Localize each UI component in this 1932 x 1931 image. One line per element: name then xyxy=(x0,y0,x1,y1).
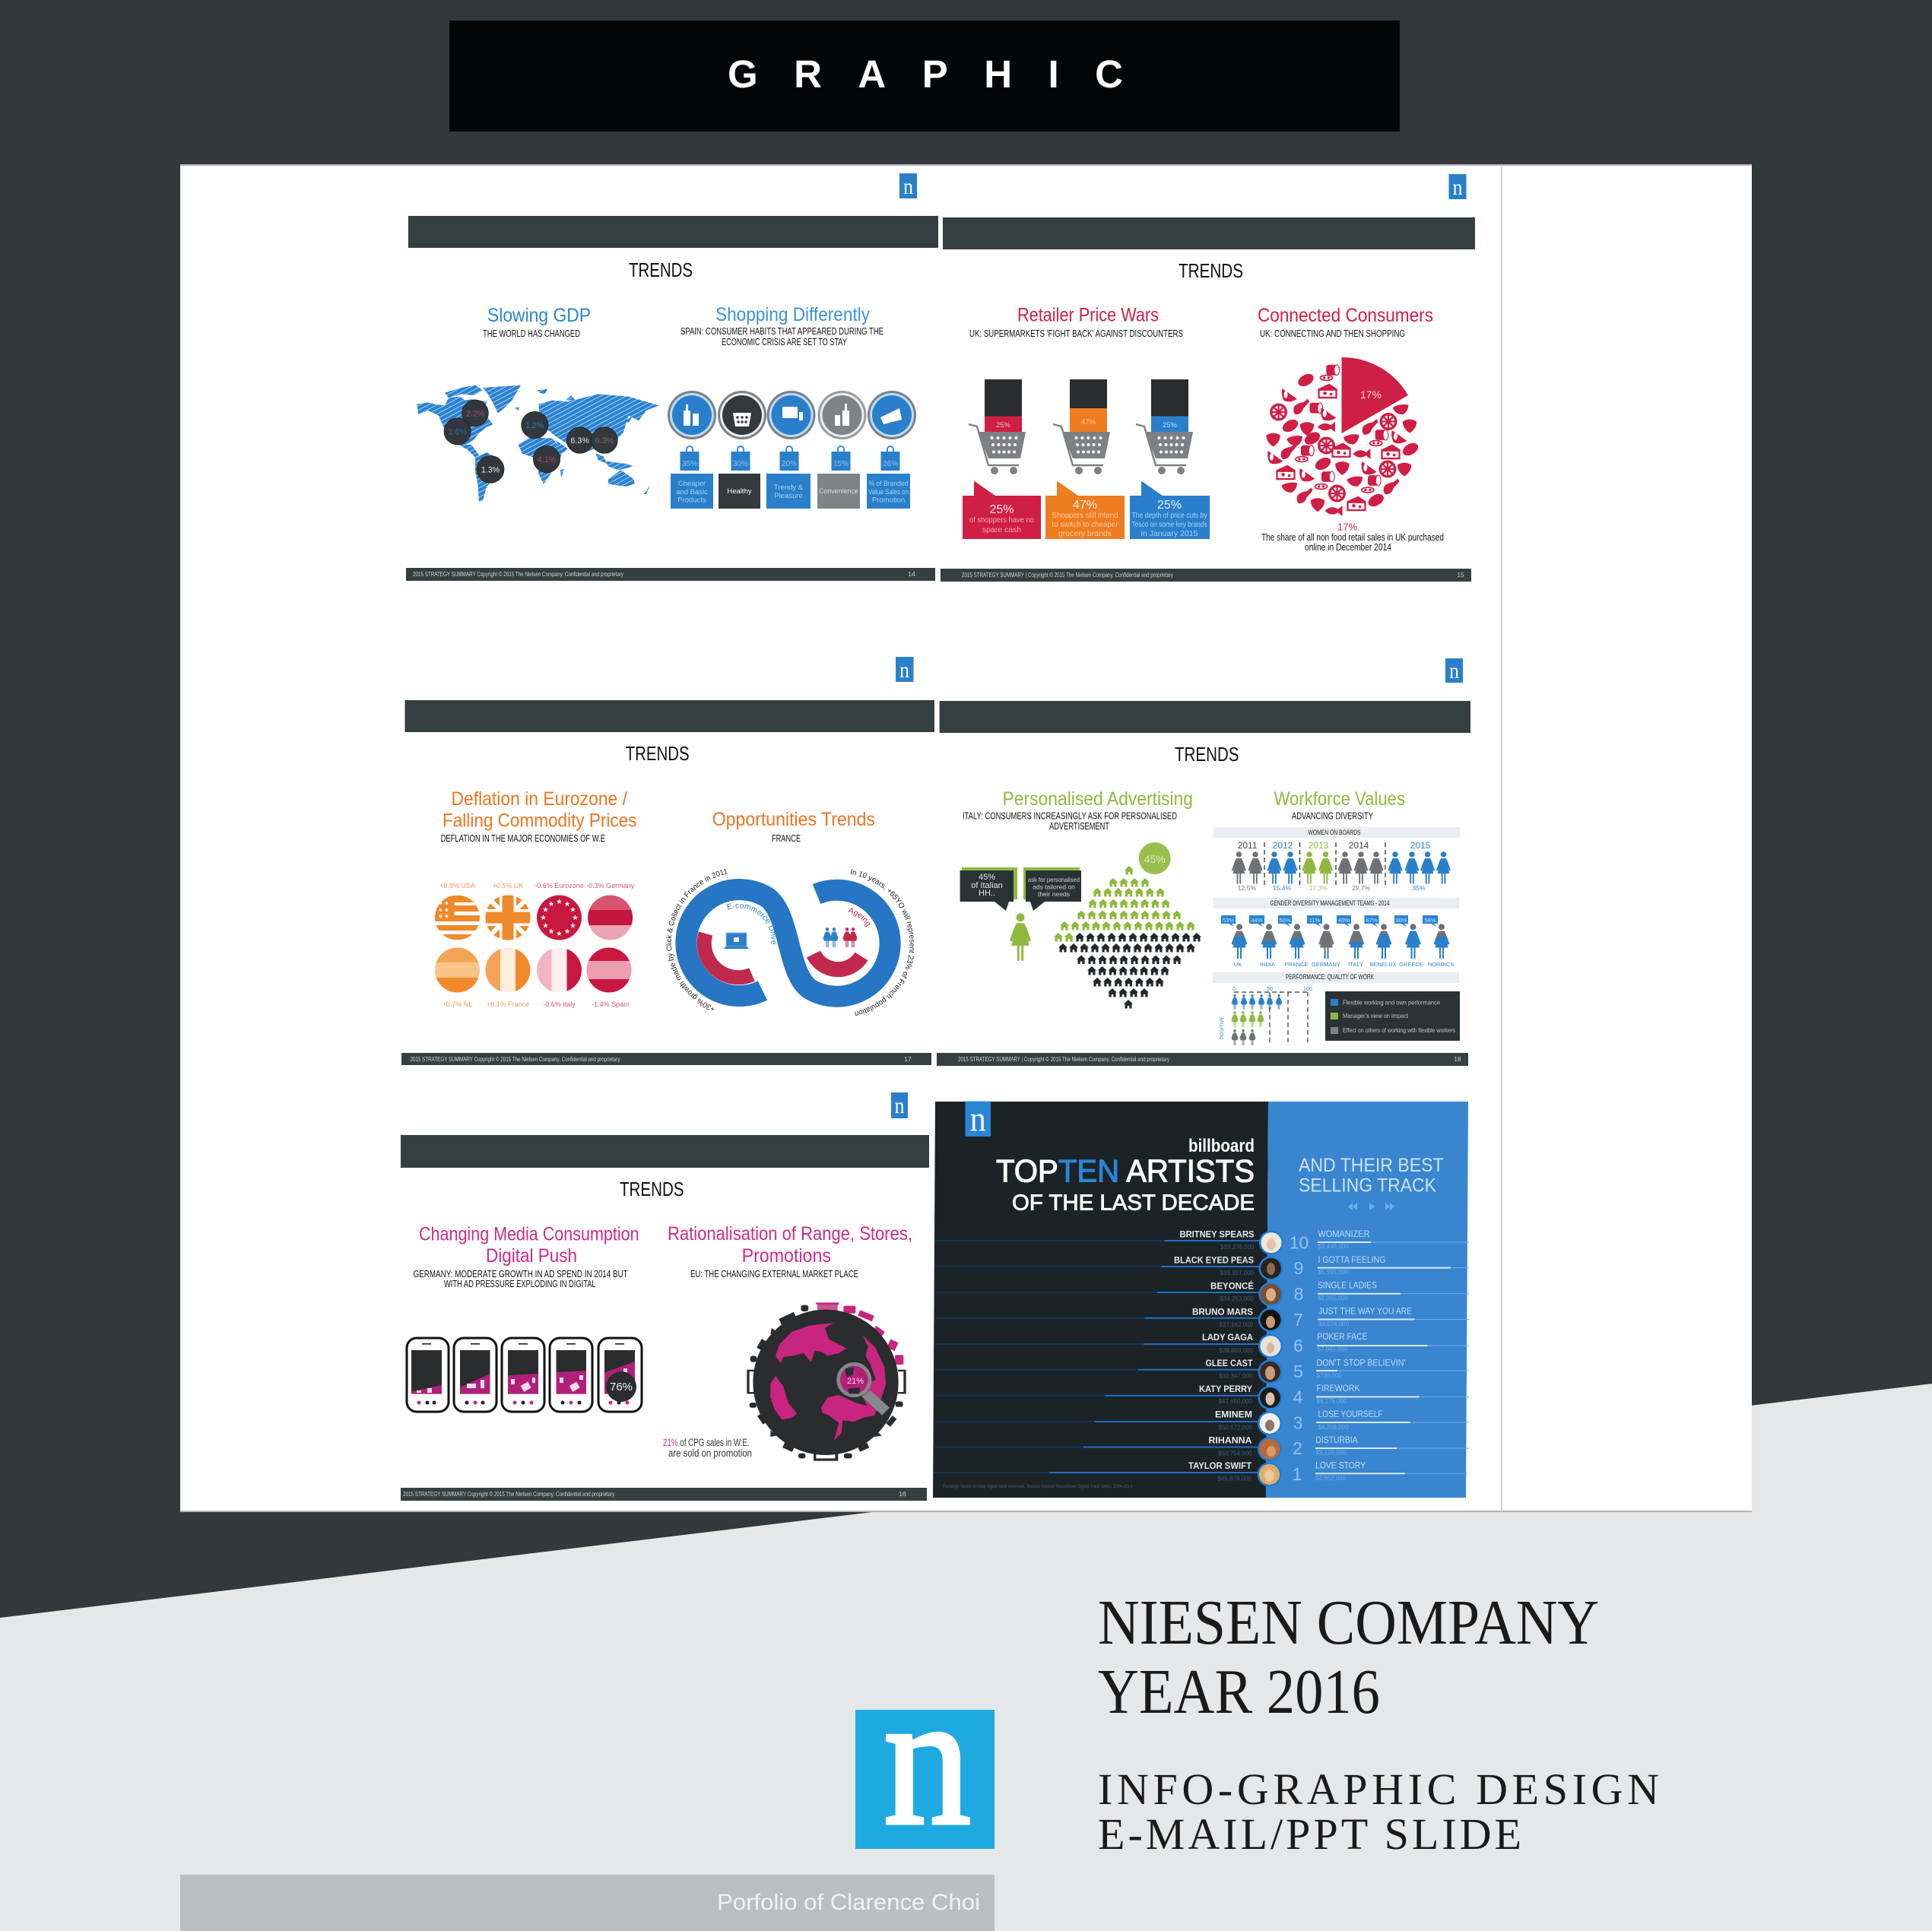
artist row 1 xyxy=(934,1460,1467,1486)
subheading: world changed: THE WORLD HAS CHANGED xyxy=(483,328,580,339)
heading: trends: TRENDS xyxy=(626,742,690,765)
legend box xyxy=(1325,991,1460,1041)
artist row 9: BLACK EYED PEAS xyxy=(1174,1254,1254,1265)
footer bar: 16 xyxy=(899,1490,906,1498)
shopping habit circles xyxy=(668,391,916,439)
habit boxes: Value Sales on xyxy=(868,488,909,496)
icon: green woman xyxy=(1010,913,1031,961)
artist row 4 xyxy=(935,1383,1469,1409)
pie caption: 17% xyxy=(1337,522,1357,532)
footer bar: 17 xyxy=(904,1055,912,1063)
section: performance quality of work: 0 xyxy=(1232,987,1236,992)
speech bubble: ask for personalised: ask for personalised xyxy=(1028,876,1080,883)
section: gender diversity: GENDER DIVERSITY MANAGEMENT TEAMS - 2014 xyxy=(1270,899,1390,907)
pie caption xyxy=(1261,522,1444,553)
title banner: GRAPHIC xyxy=(728,52,1123,96)
footer bar: 2015 STRATEGY SUMMARY Copyright © 2015 The Nielsen Company. Confidential and proprietary xyxy=(411,1055,620,1063)
country flag labels: -0.3% Germany xyxy=(586,882,635,889)
heading: deflation: Falling Commodity Prices xyxy=(443,810,637,832)
footer bar xyxy=(401,1488,927,1501)
icon: laptop xyxy=(724,933,750,949)
footer bar: 2015 STRATEGY SUMMARY | Copyright © 2015 The Nielsen Company. Confidential and proprietary xyxy=(962,571,1174,579)
subheading: france: FRANCE xyxy=(772,833,801,844)
section: gender diversity: 56% xyxy=(1424,917,1436,924)
icon: elderly couple red xyxy=(842,927,858,947)
artist row 6: $7,065,000 xyxy=(1317,1346,1348,1353)
panel: slide 15 retailer price wars and connected consumers xyxy=(941,174,1475,582)
section: gender diversity: INDIA xyxy=(1260,961,1275,968)
speech bubble: 45 percent xyxy=(960,867,1017,911)
artist row 4: $5,175,000 xyxy=(1317,1397,1347,1405)
artist row 3: $4,208,000 xyxy=(1318,1424,1349,1431)
title: best selling track: SELLING TRACK xyxy=(1299,1175,1436,1196)
shopping carts with stacked bars: 25% xyxy=(1163,421,1178,430)
panel: slide 14 slowing GDP and shopping differently xyxy=(406,173,938,581)
footer bar: 2015 STRATEGY SUMMARY Copyright © 2015 The Nielsen Company. Confidential and proprietary xyxy=(413,570,624,578)
artist row 2: DISTURBIA xyxy=(1315,1435,1358,1445)
76 percent badge: 76% xyxy=(610,1381,633,1394)
country flag labels: -0.6% Italy xyxy=(543,1000,576,1008)
artist row 7: $37,162,000 xyxy=(1220,1321,1254,1328)
text block: project type: E-MAIL/PPT SLIDE xyxy=(1098,1809,1521,1859)
artist row 6 xyxy=(935,1331,1469,1359)
callout: 25 percent price cuts: The depth of price cuts by xyxy=(1131,511,1207,520)
pie caption: The share of all non food retail sales in UK purchased xyxy=(1261,531,1444,543)
panel: slide 17 deflation and opportunities xyxy=(401,657,934,1065)
flag: USA xyxy=(435,895,481,940)
flag: Netherlands xyxy=(435,947,481,993)
callout: 47 percent switch brands: Shoppers still intend xyxy=(1052,511,1118,520)
subheading: italy: ADVERTISEMENT xyxy=(1049,821,1109,832)
callout: 25 percent price cuts: 25% xyxy=(1157,499,1182,512)
artist row 9: $33,327,000 xyxy=(1220,1270,1255,1276)
food pie chart xyxy=(1266,357,1420,516)
habit boxes: Trendy & xyxy=(774,484,804,492)
artist row 7: 7 xyxy=(1293,1310,1303,1330)
section: gender diversity xyxy=(1213,898,1459,968)
callout: 25 percent no spare cash: spare cash xyxy=(982,525,1021,534)
shopping bags with percentages: 35% xyxy=(682,460,697,468)
artist row 6: $38,669,000 xyxy=(1220,1347,1254,1354)
flag: Germany xyxy=(588,895,633,940)
subheading: diversity: ADVANCING DIVERSITY xyxy=(1292,810,1373,821)
artist row 5: 5 xyxy=(1293,1362,1303,1381)
section: women on boards: 35% xyxy=(1412,884,1426,892)
callout: 25 percent price cuts: Tesco on some key brands xyxy=(1131,520,1207,529)
callout: 25 percent price cuts: in January 2015 xyxy=(1141,529,1198,538)
section: gender diversity: 53% xyxy=(1223,917,1234,924)
logo badge: n xyxy=(894,1093,905,1118)
artist row 3: 3 xyxy=(1293,1413,1302,1432)
section: gender diversity: GREECE xyxy=(1399,961,1423,968)
heading: deflation: Deflation in Eurozone / xyxy=(452,788,627,810)
artist row 4: KATY PERRY xyxy=(1199,1384,1252,1394)
artist row 8: SINGLE LADIES xyxy=(1318,1280,1377,1291)
heading: personalised advertising: Personalised Advertising xyxy=(1002,788,1193,810)
section: women on boards: 2014 xyxy=(1349,840,1369,851)
artist row 8: $34,253,000 xyxy=(1220,1295,1255,1302)
heading: opportunities: Opportunities Trends xyxy=(712,809,875,830)
background: light lower wedge xyxy=(0,1384,1932,1931)
artist row 2: RIHANNA xyxy=(1209,1435,1252,1446)
world map: 1.3% xyxy=(481,465,500,474)
infinity loop diagram: E-commerce Drive xyxy=(727,903,777,944)
legend box: Flexible working and own performance xyxy=(1343,999,1440,1007)
panel: slide 18 personalised advertising and workforce values xyxy=(937,658,1470,1066)
section: gender diversity: UK xyxy=(1234,961,1242,968)
shopping bags with percentages: 26% xyxy=(883,460,898,468)
text block: project type xyxy=(1098,1765,1659,1859)
blue right half xyxy=(1266,1102,1468,1498)
section: gender diversity: 11% xyxy=(1309,917,1321,924)
footer bar: 15 xyxy=(1457,571,1464,579)
heading: slowing GDP: Slowing GDP xyxy=(487,305,591,326)
title banner xyxy=(449,21,1400,132)
artist row 1: $65,879,000 xyxy=(1218,1475,1252,1482)
world map xyxy=(417,385,659,502)
infinity loop diagram: In 10 years, +65YO will represent 23% of French population xyxy=(850,869,914,1016)
flag: Spain xyxy=(586,947,632,993)
portfolio credit bar: Porfolio of Clarence Choi xyxy=(717,1890,980,1915)
header bar xyxy=(943,217,1475,249)
section: gender diversity: GERMANY xyxy=(1312,961,1340,968)
callout: 25 percent price cuts xyxy=(1130,480,1210,539)
pie caption: online in December 2014 xyxy=(1305,541,1391,553)
header bar xyxy=(408,216,938,248)
subheading: connecting: UK: CONNECTING AND THEN SHOPPING xyxy=(1260,328,1405,339)
heading: trends: TRENDS xyxy=(1175,743,1239,766)
section: performance quality of work: 50 xyxy=(1267,987,1273,992)
habit boxes: Convenience xyxy=(819,487,858,496)
world map: 1.6% xyxy=(449,427,467,436)
artist row 9: I GOTTA FEELING xyxy=(1318,1254,1385,1265)
artist row 4: FIREWORK xyxy=(1317,1383,1359,1394)
callout: 47 percent switch brands: grocery brands xyxy=(1058,529,1112,538)
shopping carts with stacked bars: 25% xyxy=(996,421,1011,430)
callout: 47 percent switch brands: to switch to cheaper xyxy=(1052,520,1118,529)
section: women on boards: 2012 xyxy=(1273,840,1293,851)
logo badge: n xyxy=(899,658,909,683)
heading: retailer price wars: Retailer Price Wars xyxy=(1017,304,1159,325)
footnote: ranking source: Rankings based on total digital track revenues. Source: Nielsen SoundScan Digital Track Sales, 2004-2014 xyxy=(943,1484,1132,1489)
habit boxes: Promotion xyxy=(872,496,905,505)
infinity loop diagram xyxy=(666,869,914,1016)
header bar xyxy=(940,701,1470,733)
artist row 1: LOVE STORY xyxy=(1315,1460,1366,1470)
habit boxes: Healthy xyxy=(727,487,752,496)
flag: France xyxy=(485,947,531,993)
section: gender diversity: 50% xyxy=(1279,917,1291,924)
logo: large n badge xyxy=(855,1654,995,1865)
artist row 1: 1 xyxy=(1293,1464,1302,1484)
header bar xyxy=(404,700,934,732)
artist row 7: $4,074,000 xyxy=(1318,1321,1350,1327)
artist row 8: $2,065,000 xyxy=(1318,1295,1349,1302)
country flag labels: +0.7% NL xyxy=(443,1000,472,1008)
heading: changing media consumption: Changing Media Consumption xyxy=(419,1223,639,1245)
section: women on boards: 2015 xyxy=(1410,840,1431,851)
artist row 3: $50,672,000 xyxy=(1218,1425,1253,1431)
artist row 3: EMINEM xyxy=(1215,1409,1252,1420)
heading: company and year: YEAR 2016 xyxy=(1098,1657,1380,1727)
footer bar xyxy=(406,568,935,581)
shopping bags with percentages: 30% xyxy=(733,460,748,468)
section: performance quality of work: 100 xyxy=(1303,987,1312,992)
caption: CPG sales xyxy=(663,1437,752,1459)
speech bubble: 45 percent: of Italian xyxy=(971,881,1003,890)
flag: Italy xyxy=(537,947,582,993)
45 percent badge xyxy=(1139,842,1171,874)
footer bar: 2015 STRATEGY SUMMARY | Copyright © 2015 The Nielsen Company. Confidential and proprietary xyxy=(958,1055,1170,1063)
artist row 5: GLEE CAST xyxy=(1206,1358,1253,1368)
logo badge: n xyxy=(1452,175,1463,200)
artist row 10: WOMANIZER xyxy=(1318,1229,1370,1239)
shopping bags with percentages: 15% xyxy=(833,460,849,468)
habit boxes xyxy=(671,474,910,509)
heading: rationalisation: Rationalisation of Range, Stores, xyxy=(668,1223,912,1245)
artist row 3 xyxy=(935,1409,1469,1435)
artist row 2: 2 xyxy=(1293,1438,1302,1458)
infinity loop diagram: Ageing xyxy=(848,908,871,927)
artist row 8: 8 xyxy=(1294,1284,1303,1304)
world map: 2.2% xyxy=(466,409,485,418)
logo badge xyxy=(1449,174,1466,200)
section: women on boards: 2011 xyxy=(1238,840,1258,851)
caption: CPG sales: 21% of CPG sales in W.E. xyxy=(663,1437,750,1448)
artist row 2 xyxy=(935,1435,1469,1461)
subheading: italy: ITALY: CONSUMERS INCREASINGLY ASK FOR PERSONALISED xyxy=(963,810,1177,821)
panel: slide 16 media consumption and rationalisation xyxy=(401,1092,929,1501)
habit boxes: % of Branded xyxy=(868,480,908,488)
food pie chart: 17% xyxy=(1360,388,1382,401)
logo badge: n xyxy=(903,174,913,199)
speech bubble: ask for personalised xyxy=(1023,867,1081,911)
section: gender diversity: BENELUX xyxy=(1369,961,1397,968)
section: performance quality of work xyxy=(1213,972,1459,1045)
section: women on boards: 15.4% xyxy=(1273,884,1291,892)
shopping bags with percentages xyxy=(680,446,900,471)
logo badge xyxy=(896,657,914,683)
heading: changing media consumption: Digital Push xyxy=(486,1245,577,1267)
artist row 10: BRITNEY SPEARS xyxy=(1180,1229,1255,1240)
section: gender diversity: 40% xyxy=(1338,917,1350,924)
heading: company and year xyxy=(1098,1587,1599,1727)
infinity loop diagram: +30% growth made by Click & Collect in France in 2011 xyxy=(666,869,728,1011)
artist row 10 xyxy=(935,1229,1469,1255)
habit boxes: Products xyxy=(677,496,706,505)
logo badge xyxy=(891,1092,908,1118)
artist row 7: BRUNO MARS xyxy=(1192,1306,1253,1317)
artist row 5: DON'T STOP BELIEVIN' xyxy=(1317,1358,1405,1368)
shopping carts with stacked bars xyxy=(969,379,1193,474)
artist row 6: LADY GAGA xyxy=(1202,1332,1253,1343)
speech bubble: 45 percent: HH.. xyxy=(979,889,995,898)
habit boxes: Pleasure xyxy=(774,492,803,500)
flag: Eurozone xyxy=(537,895,582,940)
footer bar: 18 xyxy=(1454,1055,1461,1063)
title: of the last decade: OF THE LAST DECADE xyxy=(1012,1191,1255,1215)
section: performance quality of work: PERFORMANCE: QUALITY OF WORK xyxy=(1286,973,1374,981)
heading: rationalisation: Promotions xyxy=(742,1245,831,1267)
smartphones chart xyxy=(407,1338,642,1412)
world map: 1.2% xyxy=(525,421,544,430)
heading: workforce values: Workforce Values xyxy=(1274,788,1405,810)
legend box: Effect on others of working with flexible workers xyxy=(1343,1026,1455,1034)
footer bar: 2015 STRATEGY SUMMARY Copyright © 2015 The Nielsen Company. Confidential and proprietary xyxy=(403,1490,615,1498)
artist row 2: $3,120,000 xyxy=(1315,1449,1347,1457)
76 percent badge xyxy=(606,1371,636,1402)
icon: elderly couple blue xyxy=(823,927,839,947)
artist row 4: $47,650,000 xyxy=(1218,1398,1253,1405)
artist row 1: TAYLOR SWIFT xyxy=(1188,1460,1252,1471)
header bar xyxy=(401,1135,929,1168)
shopping bags with percentages: 20% xyxy=(782,460,797,468)
footer bar xyxy=(941,569,1471,582)
world map: 4.1% xyxy=(538,455,557,465)
subheading: spain: ECONOMIC CRISIS ARE SET TO STAY xyxy=(722,337,847,347)
text block: project type: INFO-GRAPHIC DESIGN xyxy=(1098,1765,1659,1814)
artist row 8 xyxy=(935,1280,1469,1306)
country flag labels: +0.8% USA xyxy=(439,882,475,889)
habit boxes: and Basic xyxy=(676,488,708,496)
artist row 1: $3,862,000 xyxy=(1315,1475,1347,1482)
artist row 9: $5,995,000 xyxy=(1318,1269,1349,1276)
panel: white sheet holding slides xyxy=(180,164,1752,1512)
country flag labels xyxy=(439,882,635,1008)
country flag labels: +0.5% UK xyxy=(493,882,523,889)
artist row 5: $739,000 xyxy=(1317,1372,1342,1379)
artist row 6: 6 xyxy=(1293,1336,1303,1356)
artist row 7 xyxy=(935,1306,1469,1332)
artist row 4: 4 xyxy=(1293,1387,1303,1407)
heading: company and year: NIESEN COMPANY xyxy=(1098,1587,1599,1658)
subheading: spain: SPAIN: CONSUMER HABITS THAT APPEARED DURING THE xyxy=(680,326,884,337)
callout: 47 percent switch brands xyxy=(1045,480,1125,539)
subheading: deflation: DEFLATION IN THE MAJOR ECONOMIES OF W.E xyxy=(441,833,605,844)
artist row 5: $39,347,000 xyxy=(1219,1373,1253,1379)
artist row 8: BEYONCÉ xyxy=(1210,1280,1254,1291)
section: gender diversity: 67% xyxy=(1366,917,1378,924)
section: gender diversity: NORDICS xyxy=(1428,961,1454,968)
logo badge: n xyxy=(970,1099,986,1139)
artist row 10: 10 xyxy=(1290,1233,1309,1253)
world map: 6.3% xyxy=(571,436,589,445)
country flag labels: -1.4% Spain xyxy=(592,1000,629,1008)
heading: trends: TRENDS xyxy=(629,258,693,281)
section: women on boards: 17.3% xyxy=(1309,884,1328,892)
heading: trends: TRENDS xyxy=(1179,259,1243,282)
section: gender diversity: FRANCE xyxy=(1285,961,1308,968)
billboard wordmark: billboard xyxy=(1188,1136,1255,1156)
footer bar xyxy=(401,1053,931,1065)
habit boxes: Cheaper xyxy=(678,480,706,488)
section: women on boards: 2013 xyxy=(1309,840,1329,851)
section: gender diversity: 44% xyxy=(1251,917,1263,924)
section: gender diversity: ITALY xyxy=(1348,961,1363,968)
callout: 25 percent no spare cash: 25% xyxy=(989,503,1014,516)
subheading: EU: EU: THE CHANGING EXTERNAL MARKET PLACE xyxy=(690,1269,858,1279)
logo badge: n xyxy=(1449,658,1459,683)
subheading: supermarkets: UK: SUPERMARKETS 'FIGHT BACK' AGAINST DISCOUNTERS xyxy=(969,328,1183,339)
speech bubble: 45 percent: 45% xyxy=(979,873,995,882)
logo badge xyxy=(899,173,917,199)
country flag labels: +0.1% France xyxy=(487,1000,529,1008)
artist row 5 xyxy=(935,1358,1469,1384)
house pictogram diamond xyxy=(1054,866,1201,1008)
artist row 7: JUST THE WAY YOU ARE xyxy=(1318,1306,1412,1317)
artist row 10: $33,278,000 xyxy=(1220,1244,1255,1251)
subheading: germany: GERMANY: MODERATE GROWTH IN AD SPEND IN 2014 BUT xyxy=(414,1269,628,1279)
footer bar xyxy=(937,1053,1468,1066)
section: gender diversity: 80% xyxy=(1395,917,1407,924)
title: top ten artists: TOPTEN ARTISTS xyxy=(996,1153,1255,1189)
panel: billboard top ten artists slide xyxy=(933,1099,1469,1498)
section: women on boards: 12.5% xyxy=(1238,884,1256,892)
callout: 25 percent no spare cash xyxy=(963,480,1041,539)
portfolio credit bar xyxy=(180,1875,995,1931)
artist row 6: POKER FACE xyxy=(1317,1331,1367,1342)
heading: shopping differently: Shopping Differently xyxy=(715,304,870,325)
flag: UK xyxy=(485,895,531,940)
country flag labels: -0.6% Eurozone xyxy=(535,882,584,889)
heading: connected consumers: Connected Consumers xyxy=(1258,305,1433,326)
artist row 2: $53,754,000 xyxy=(1218,1451,1252,1457)
callout: 25 percent no spare cash: of shoppers have no xyxy=(969,515,1034,525)
45 percent badge: 45% xyxy=(1144,853,1166,865)
speech bubble: ask for personalised: their needs xyxy=(1038,890,1070,898)
globe with magnifier: 21% xyxy=(847,1377,864,1386)
speech bubble: ask for personalised: ads tailored on xyxy=(1033,883,1075,891)
logo: large n badge: n xyxy=(884,1654,971,1865)
logo badge xyxy=(1445,658,1463,683)
world map: 6.3% xyxy=(595,436,614,445)
artist row 9: 9 xyxy=(1294,1258,1303,1278)
shopping carts with stacked bars: 47% xyxy=(1081,418,1096,426)
section: women on boards: WOMEN ON BOARDS xyxy=(1308,829,1361,836)
subheading: germany: WITH AD PRESSURE EXPLODING IN DIGITAL xyxy=(444,1279,596,1289)
section: women on boards: 29.7% xyxy=(1352,884,1370,892)
section: performance quality of work: POSITIVE xyxy=(1220,1016,1225,1039)
title: best selling track: AND THEIR BEST xyxy=(1299,1155,1444,1176)
dark left half xyxy=(933,1102,1268,1498)
legend box: Manager's view on impact xyxy=(1343,1012,1409,1019)
heading: trends: TRENDS xyxy=(620,1178,684,1200)
callout: 47 percent switch brands: 47% xyxy=(1073,499,1097,512)
artist row 10: $3,446,000 xyxy=(1318,1243,1349,1250)
caption: CPG sales: are sold on promotion xyxy=(668,1447,752,1459)
artist row 3: LOSE YOURSELF xyxy=(1318,1409,1382,1419)
globe with magnifier xyxy=(747,1302,906,1461)
section: women on boards xyxy=(1213,827,1460,892)
playback controls xyxy=(1348,1203,1394,1210)
footer bar: 14 xyxy=(908,570,915,578)
artist row 9 xyxy=(935,1254,1469,1280)
